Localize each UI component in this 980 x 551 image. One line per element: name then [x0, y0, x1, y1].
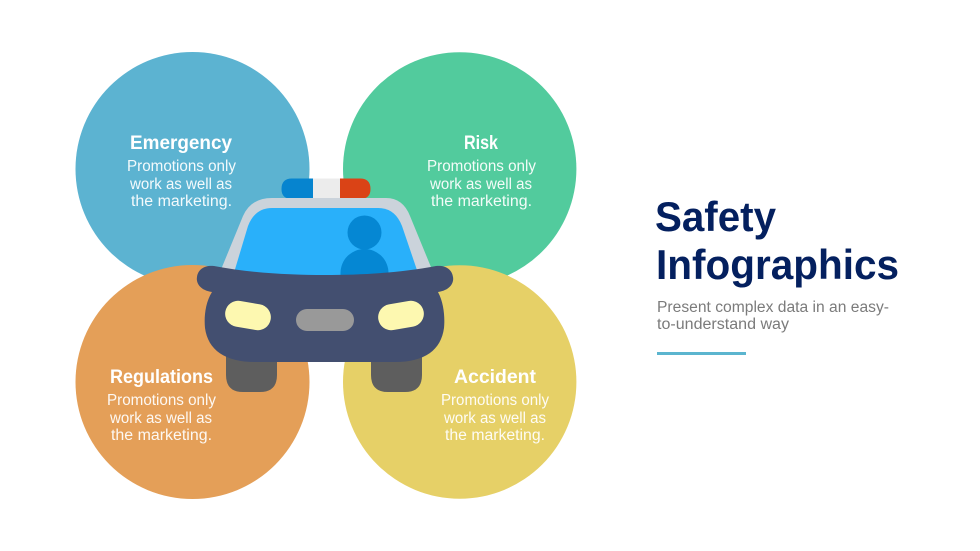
text: risk description: Promotions only: [427, 158, 536, 175]
heading: regulations: Regulations: [110, 366, 213, 388]
driver silhouette: [340, 216, 388, 276]
subtitle: Present complex data in an easy-: [657, 299, 889, 316]
text: regulations description: work as well as: [109, 410, 212, 427]
text: regulations description: [107, 392, 216, 444]
siren light bar: [282, 178, 370, 199]
windshield: [233, 208, 419, 276]
text: emergency description: Promotions only: [127, 158, 236, 175]
title: [655, 193, 899, 288]
text: accident description: the marketing.: [445, 427, 545, 444]
grille: [296, 309, 354, 331]
wheels: [226, 350, 422, 392]
accent rule: [657, 352, 746, 355]
text: accident description: [441, 392, 549, 444]
text: accident description: work as well as: [443, 410, 546, 427]
text: regulations description: Promotions only: [107, 392, 216, 409]
car body: [197, 266, 453, 362]
subtitle: [657, 299, 889, 333]
car roof frame: [220, 198, 433, 272]
heading: accident: Accident: [454, 366, 536, 388]
panel: accident: [343, 265, 576, 499]
title: Safety: [655, 193, 777, 240]
text: emergency description: [127, 158, 236, 210]
heading: emergency: Emergency: [130, 132, 232, 154]
panel: emergency: [76, 52, 310, 286]
left headlight: [223, 299, 273, 332]
text: risk description: the marketing.: [431, 193, 532, 210]
panel: regulations: [76, 265, 310, 499]
heading: risk: Risk: [464, 132, 498, 154]
text: emergency description: the marketing.: [131, 193, 232, 210]
text: risk description: work as well as: [429, 176, 532, 193]
icon: police car: [197, 178, 453, 392]
title: Infographics: [656, 241, 899, 288]
text: accident description: Promotions only: [441, 392, 549, 409]
right headlight: [376, 299, 426, 332]
subtitle: to-understand way: [657, 316, 789, 333]
text: regulations description: the marketing.: [111, 427, 212, 444]
text: risk description: [427, 158, 536, 210]
panel: risk: [343, 52, 576, 286]
text: emergency description: work as well as: [129, 176, 232, 193]
